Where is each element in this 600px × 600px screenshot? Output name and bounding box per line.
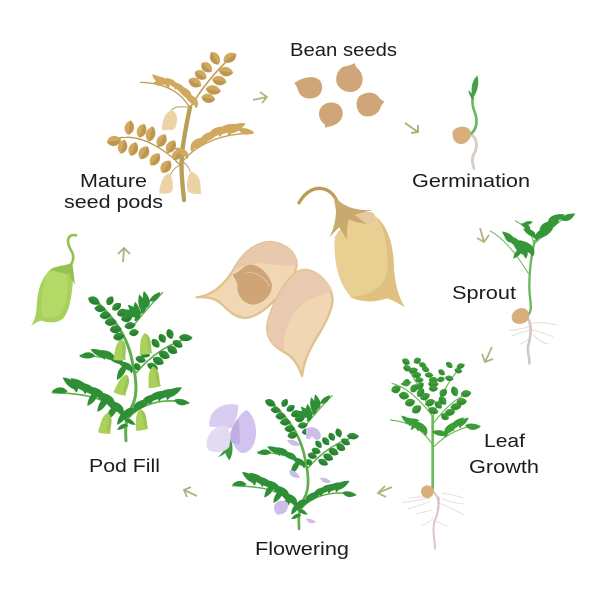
small flowers <box>274 427 331 523</box>
seed <box>294 77 322 99</box>
label: Bean seeds: Bean seeds <box>290 39 397 60</box>
label: Sprout: Sprout <box>452 282 516 303</box>
green pods <box>98 332 161 434</box>
open pod half <box>267 270 333 376</box>
seed <box>319 103 343 128</box>
plant: sprout <box>490 211 576 363</box>
label: Leaf Growth: Leaf <box>484 430 526 451</box>
label: Pod Fill: Pod Fill <box>89 455 160 476</box>
label: Mature seed pods: seed pods <box>64 191 163 212</box>
label: Germination: Germination <box>412 170 530 191</box>
flower close-up <box>207 404 256 460</box>
arrow: leaf growth to flowering <box>378 486 392 497</box>
seed <box>357 93 385 116</box>
arrow: flowering to pod fill <box>184 487 197 497</box>
open pod half with seed <box>197 242 297 318</box>
plant: leaf growth <box>390 356 481 549</box>
label: Mature seed pods <box>64 170 163 212</box>
label: Leaf Growth: Growth <box>469 456 539 477</box>
plant: flowering <box>232 394 359 529</box>
plant: mature seed pods <box>106 50 254 200</box>
label: Leaf Growth <box>469 430 539 477</box>
arrow: pods to seeds <box>253 92 267 103</box>
arrow: pod fill to mature <box>118 248 130 262</box>
centre: chickpea pods close-up <box>197 188 405 376</box>
seed <box>336 63 363 92</box>
arrow: sprout to leaf growth <box>482 347 493 362</box>
plant: germination <box>452 75 478 168</box>
label: Flowering: Flowering <box>255 538 349 559</box>
bean seeds <box>294 63 385 128</box>
green pod close-up <box>31 235 76 327</box>
arrow: seeds to germination <box>405 123 418 133</box>
arrow: germination to sprout <box>477 228 489 242</box>
plant: pod fill <box>52 291 193 441</box>
closed pod <box>298 188 405 307</box>
label: Mature seed pods: Mature <box>80 170 147 191</box>
